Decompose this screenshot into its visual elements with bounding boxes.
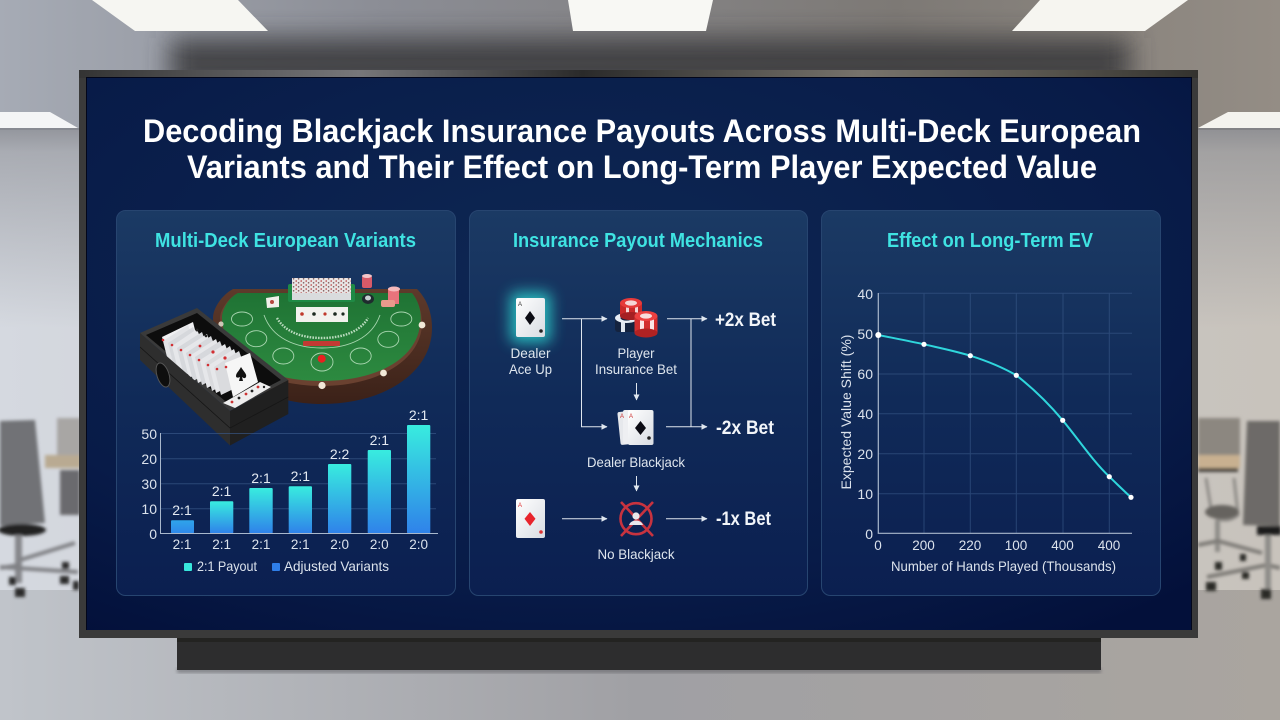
heading: effect: Effect on Long-Term EV bbox=[887, 230, 1094, 252]
arrows: payouts bbox=[666, 319, 707, 427]
icon: dealer blackjack cards bbox=[617, 410, 654, 445]
icon: crossed out circle bbox=[620, 502, 653, 536]
bar value labels: 2:1 bbox=[370, 432, 389, 448]
y axis labels: 30 bbox=[141, 476, 157, 492]
x axis tick labels: 100 bbox=[1005, 538, 1027, 553]
output: minus 2x bet: -2x Bet bbox=[716, 418, 775, 439]
bars bbox=[171, 425, 430, 533]
icon: dealer blackjack cards: A bbox=[629, 414, 633, 420]
heading: mechanics: Insurance Payout Mechanics bbox=[513, 230, 763, 252]
illustration: blackjack table bbox=[213, 274, 432, 404]
y axis labels: 0 bbox=[149, 526, 157, 542]
label: dealer blackjack: Dealer Blackjack bbox=[587, 454, 686, 470]
output: plus 2x bet: +2x Bet bbox=[715, 310, 777, 331]
legend: 2:1 Payout bbox=[197, 558, 257, 574]
data points bbox=[875, 332, 1134, 500]
legend: Adjusted Variants bbox=[284, 558, 389, 574]
x axis tick labels: 400 bbox=[1051, 538, 1074, 553]
label: player insurance bet bbox=[595, 345, 677, 377]
y axis labels: 20 bbox=[141, 451, 157, 467]
label: player insurance bet: Player bbox=[618, 345, 655, 361]
left office chairs and table bbox=[0, 418, 81, 597]
icon: insurance chips bbox=[615, 298, 658, 338]
y axis labels: 50 bbox=[141, 426, 157, 442]
panel: multi-deck european variants bbox=[116, 210, 456, 596]
y axis tick labels: 10 bbox=[857, 486, 873, 502]
x axis labels: 2:1 bbox=[212, 537, 231, 552]
icon: red diamond card: A bbox=[518, 503, 522, 509]
bar value labels: 2:1 bbox=[251, 470, 271, 486]
title bbox=[143, 113, 1141, 185]
x axis labels: 2:1 bbox=[291, 537, 310, 552]
legend bbox=[184, 558, 389, 574]
bar value labels: 2:1 bbox=[409, 407, 429, 423]
x axis tick labels bbox=[874, 538, 1120, 553]
bar value labels: 2:2 bbox=[330, 446, 350, 462]
arrow: blackjack to no blackjack bbox=[636, 476, 638, 491]
y axis tick labels: 60 bbox=[857, 366, 873, 382]
heading: variants: Multi-Deck European Variants bbox=[155, 230, 416, 252]
arrow: bet to dealer blackjack bbox=[636, 383, 638, 400]
bar value labels: 2:1 bbox=[291, 468, 310, 484]
label: dealer ace up: Ace Up bbox=[509, 361, 552, 377]
arrow: no blackjack to payout bbox=[666, 518, 707, 520]
line chart bbox=[838, 286, 1134, 574]
x axis tick labels: 220 bbox=[959, 538, 981, 553]
x axis labels: 2:1 bbox=[252, 537, 270, 552]
label: no blackjack: No Blackjack bbox=[598, 546, 675, 562]
x axis title: Number of Hands Played (Thousands) bbox=[891, 558, 1116, 574]
bar value labels: 2:1 bbox=[172, 502, 192, 518]
panel: effect on long-term ev bbox=[822, 210, 1160, 596]
bar value labels: 2:1 bbox=[212, 483, 232, 499]
arrows: dealer ace to outcomes bbox=[562, 319, 607, 427]
icon: dealer ace card: A bbox=[518, 302, 522, 308]
title: Variants and Their Effect on Long-Term Player Expected Value bbox=[187, 149, 1097, 185]
bar value labels bbox=[172, 407, 429, 518]
title: Decoding Blackjack Insurance Payouts Across Multi-Deck European bbox=[143, 113, 1141, 149]
display frame bbox=[79, 70, 1198, 638]
illustration: card shoe bbox=[140, 308, 288, 446]
x axis labels: 2:1 bbox=[173, 537, 191, 552]
label: dealer ace up bbox=[509, 345, 552, 377]
x axis labels: 2:0 bbox=[370, 537, 389, 552]
y axis tick labels: 40 bbox=[857, 406, 873, 422]
fanned card stack bbox=[162, 322, 258, 397]
y axis title: Expected Value Shift (%) bbox=[838, 334, 854, 490]
output: minus 1x bet: -1x Bet bbox=[716, 509, 772, 530]
y axis tick labels: 50 bbox=[857, 326, 873, 342]
x axis tick labels: 200 bbox=[912, 538, 935, 553]
x axis labels: 2:0 bbox=[409, 537, 428, 552]
arrow: card to no blackjack bbox=[562, 518, 607, 520]
x axis labels: 2:0 bbox=[330, 537, 349, 552]
label: player insurance bet: Insurance Bet bbox=[595, 361, 677, 377]
right office chairs and table bbox=[1198, 418, 1280, 599]
x axis tick labels: 400 bbox=[1098, 538, 1120, 553]
curve: ev decline bbox=[878, 335, 1131, 497]
x axis tick labels: 0 bbox=[874, 538, 882, 553]
icon: dealer blackjack cards: A bbox=[620, 414, 624, 420]
label: dealer ace up: Dealer bbox=[510, 345, 551, 361]
icon: red diamond card bbox=[516, 499, 545, 538]
bar chart bbox=[141, 407, 438, 552]
panel: insurance payout mechanics bbox=[470, 210, 808, 596]
y axis labels bbox=[141, 426, 157, 542]
loose cards in shoe bbox=[223, 382, 271, 408]
y axis labels: 10 bbox=[141, 501, 157, 517]
y axis tick labels: 0 bbox=[865, 526, 873, 542]
x axis labels bbox=[173, 537, 428, 552]
y axis tick labels: 20 bbox=[857, 446, 873, 462]
monitor stand bbox=[177, 636, 1101, 673]
y axis tick labels: 40 bbox=[857, 286, 873, 302]
icon: dealer ace card bbox=[510, 292, 551, 343]
y axis tick labels bbox=[857, 286, 873, 542]
